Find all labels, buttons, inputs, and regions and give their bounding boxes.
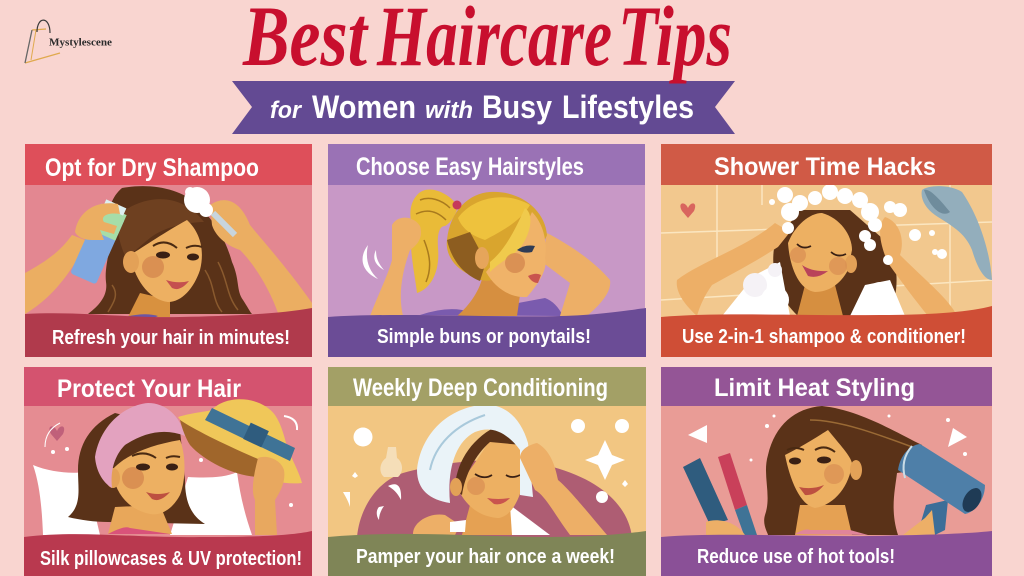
footer band: [25, 308, 312, 357]
heading: Weekly Deep Conditioning: [353, 374, 608, 402]
panel: Shower Time Hacks: [661, 144, 992, 357]
header band: [328, 367, 646, 406]
illustration: woman in towel turban: [343, 405, 629, 535]
tiled wall: [661, 185, 992, 310]
header band: [661, 367, 992, 406]
caption: Pamper your hair once a week!: [356, 546, 615, 568]
subtitle ribbon: Women: [312, 89, 416, 125]
caption: Reduce use of hot tools!: [697, 546, 895, 568]
illustration: woman shampooing in shower: [677, 210, 957, 316]
header band: [24, 367, 312, 406]
subtitle ribbon: with: [425, 97, 473, 124]
title: [242, 0, 732, 84]
caption: Silk pillowcases & UV protection!: [40, 548, 302, 570]
illustration: woman with headband, pillow and sun hat: [33, 399, 302, 535]
panel: Limit Heat Styling: [661, 367, 992, 576]
footer band: [661, 306, 992, 357]
caption: Use 2-in-1 shampoo & conditioner!: [682, 326, 966, 348]
panel: Choose Easy Hairstyles: [328, 144, 646, 357]
icon: heart: [680, 203, 695, 218]
footer band: [328, 531, 646, 576]
panel: Protect Your Hair: [24, 367, 312, 576]
caption: Refresh your hair in minutes!: [52, 327, 290, 349]
footer band: [24, 531, 312, 576]
logo: Mystylescene: Mystylescene: [49, 38, 113, 48]
logo: Mystylescene: [25, 20, 113, 63]
heading: Choose Easy Hairstyles: [356, 153, 584, 181]
sofa backdrop: [357, 460, 632, 537]
heading: Protect Your Hair: [57, 375, 241, 403]
subtitle ribbon: Lifestyles: [562, 89, 694, 125]
caption: Simple buns or ponytails!: [377, 326, 591, 348]
footer band: [328, 308, 646, 357]
illustration: woman blow-drying hair: [683, 406, 985, 535]
subtitle ribbon: for: [270, 97, 303, 124]
header band: [328, 144, 645, 185]
heading: Opt for Dry Shampoo: [45, 154, 259, 182]
heading: Limit Heat Styling: [714, 374, 915, 402]
footer band: [661, 531, 992, 576]
header band: [661, 144, 992, 185]
illustration: woman tying ponytail: [363, 190, 610, 316]
panel: Opt for Dry Shampoo: [25, 144, 312, 357]
heading: Shower Time Hacks: [714, 153, 936, 181]
shampoo foam: [769, 184, 947, 265]
illustration: woman applying dry shampoo: [25, 186, 312, 320]
subtitle ribbon: [232, 81, 735, 134]
subtitle ribbon: Busy: [482, 89, 552, 125]
icon: shower head: [922, 186, 992, 280]
header band: [25, 144, 312, 185]
panel: Weekly Deep Conditioning: [328, 367, 646, 576]
